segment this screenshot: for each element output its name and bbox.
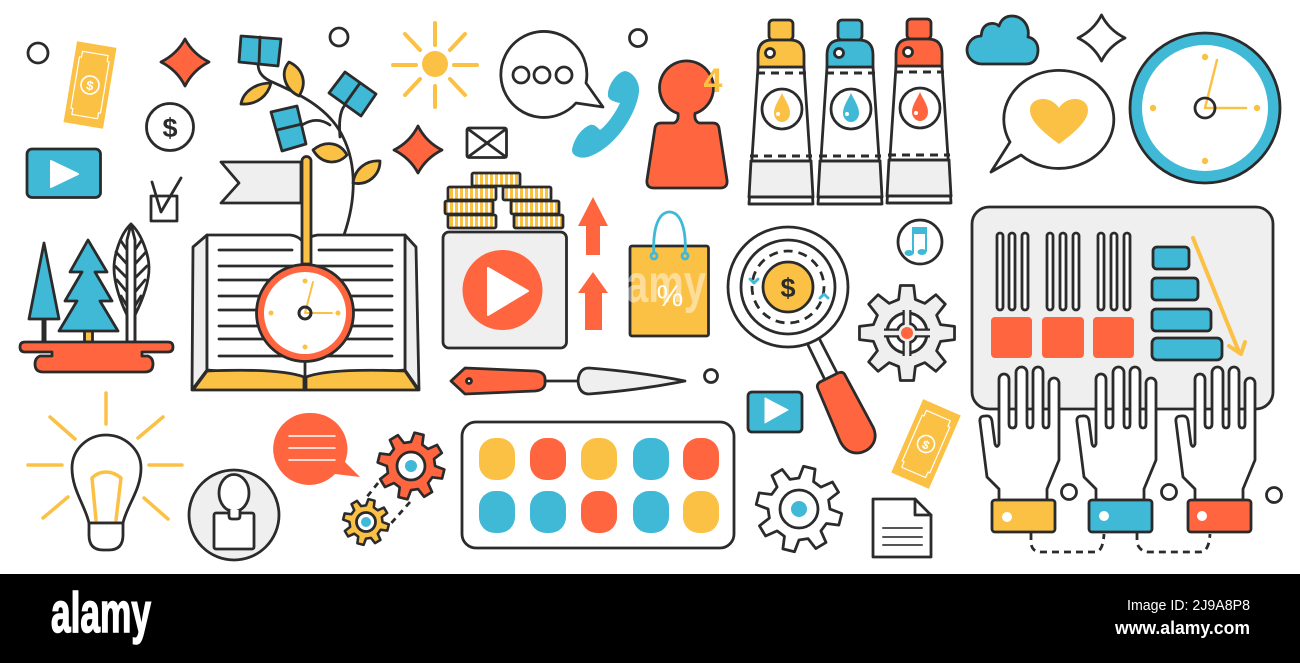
orange squares [991, 317, 1134, 358]
icon: banknote top left: $ [85, 77, 95, 94]
icon: orange diamond left [161, 39, 209, 86]
arrow: lower growth [578, 272, 608, 330]
hand left with yellow cuff [980, 367, 1059, 532]
footer band [0, 574, 1300, 663]
icon: banknote right: $ [920, 437, 932, 453]
icon: dollar coin [146, 104, 194, 150]
icon: white diamond [1078, 15, 1125, 61]
small rings by hands [1062, 484, 1282, 502]
panel: color swatch palette [462, 422, 734, 548]
plant stem and branches [258, 63, 353, 235]
icon: orange paint tube [887, 19, 951, 203]
icon: shopping bag: % [657, 280, 683, 313]
dashed links between cuffs [1031, 533, 1210, 552]
icon: orange diamond centre [394, 126, 442, 173]
icon: document [873, 499, 931, 557]
icon: light bulb [28, 393, 182, 550]
icon: envelope [467, 128, 506, 158]
small ring near plant [330, 28, 348, 46]
icon: shopping bag: amy [626, 254, 706, 314]
blue book blossoms [239, 36, 376, 151]
icon: sun [393, 23, 477, 107]
icon: linked gears [338, 426, 451, 550]
flagpole [302, 156, 311, 264]
icon: forest on island [20, 224, 173, 372]
open book [192, 235, 419, 390]
icon: blue wall clock [1130, 33, 1280, 183]
icon: yellow paint tube [749, 20, 813, 204]
small ring by knife [704, 370, 718, 382]
arrow: trend down [1193, 238, 1245, 354]
icon: orange speech bubble [273, 413, 360, 485]
icon: music note [898, 220, 942, 264]
blue stacked bars [1152, 247, 1222, 360]
icon: coin stacks [445, 173, 563, 228]
website: www.alamy.com [1114, 618, 1250, 638]
screen board [972, 207, 1273, 409]
image id: Image ID: 2J9A8P8 [1127, 597, 1250, 614]
icon: video player left [27, 149, 100, 198]
icon: banknote right [891, 399, 961, 489]
icon: shopping bag [626, 212, 708, 336]
icon: large play button card [443, 232, 566, 348]
icon: checkbox [151, 178, 181, 221]
clock on book [256, 264, 354, 362]
flag [221, 162, 301, 203]
icon: speech bubble with heart [991, 70, 1114, 172]
plant leaves [241, 62, 380, 183]
icon: person with number [647, 61, 727, 188]
icon: person with number: 4 [704, 62, 723, 100]
book and growth illustration [192, 36, 419, 390]
icon: blue paint tube [818, 20, 882, 204]
icon: magnifier with dollar [728, 227, 875, 453]
hand right with orange cuff [1176, 367, 1255, 532]
hand centre with blue cuff [1077, 367, 1156, 532]
small ring top centre [630, 30, 646, 46]
icon: user avatar [189, 470, 279, 560]
arrow: upper growth [578, 197, 608, 255]
icon: dollar coin: $ [162, 113, 178, 143]
icon: palette knife [451, 368, 685, 394]
panel: screen with hands [972, 207, 1282, 552]
footer logo: alamy [51, 581, 151, 645]
icon: speech bubble with dots [501, 31, 603, 117]
icon: magnifier with dollar: $ [780, 273, 796, 303]
icon: grey gear with target [859, 285, 955, 381]
icon: small video player [748, 392, 802, 432]
icon: white gear [747, 457, 851, 561]
small ring top left [28, 43, 48, 63]
vertical bar groups [997, 233, 1130, 310]
icon: banknote top left [64, 41, 116, 129]
icon: cloud [967, 16, 1038, 64]
icon: telephone handset [572, 71, 639, 158]
